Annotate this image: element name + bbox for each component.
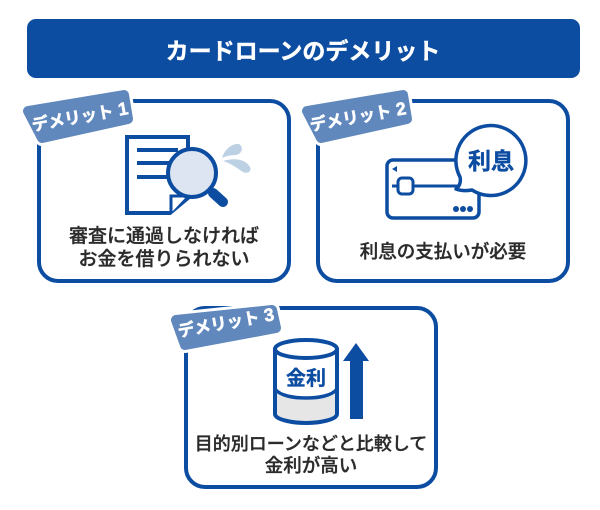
icon: rate cylinder bbox=[275, 340, 337, 425]
icon: card and interest bubble bbox=[387, 126, 526, 218]
panel: demerit 3 bbox=[176, 304, 436, 487]
tag: demerit 1: デメリット1 bbox=[30, 98, 130, 135]
panel: demerit 1 bbox=[28, 95, 289, 281]
title banner bbox=[27, 19, 580, 78]
panel: demerit 1: お金を借りられない bbox=[78, 248, 250, 270]
icon: rate cylinder: 金利 bbox=[286, 367, 326, 390]
text: demerit 3: 目的別ローンなどと比較して bbox=[195, 434, 427, 454]
icon: up arrow bbox=[343, 343, 369, 419]
text: demerit 1: 審査に通過しなければ bbox=[69, 225, 259, 247]
tag: demerit 2: デメリット2 bbox=[308, 98, 408, 135]
text: demerit 2: 利息の支払いが必要 bbox=[360, 241, 526, 262]
icon: document with magnifier bbox=[127, 137, 250, 213]
icon: card and interest bubble: 利息 bbox=[468, 148, 514, 174]
panel: demerit 3: 金利が高い bbox=[265, 455, 357, 476]
title banner: カードローンのデメリット bbox=[166, 38, 440, 64]
tag: demerit 3: デメリット3 bbox=[176, 304, 276, 341]
panel: demerit 2 bbox=[307, 95, 568, 281]
